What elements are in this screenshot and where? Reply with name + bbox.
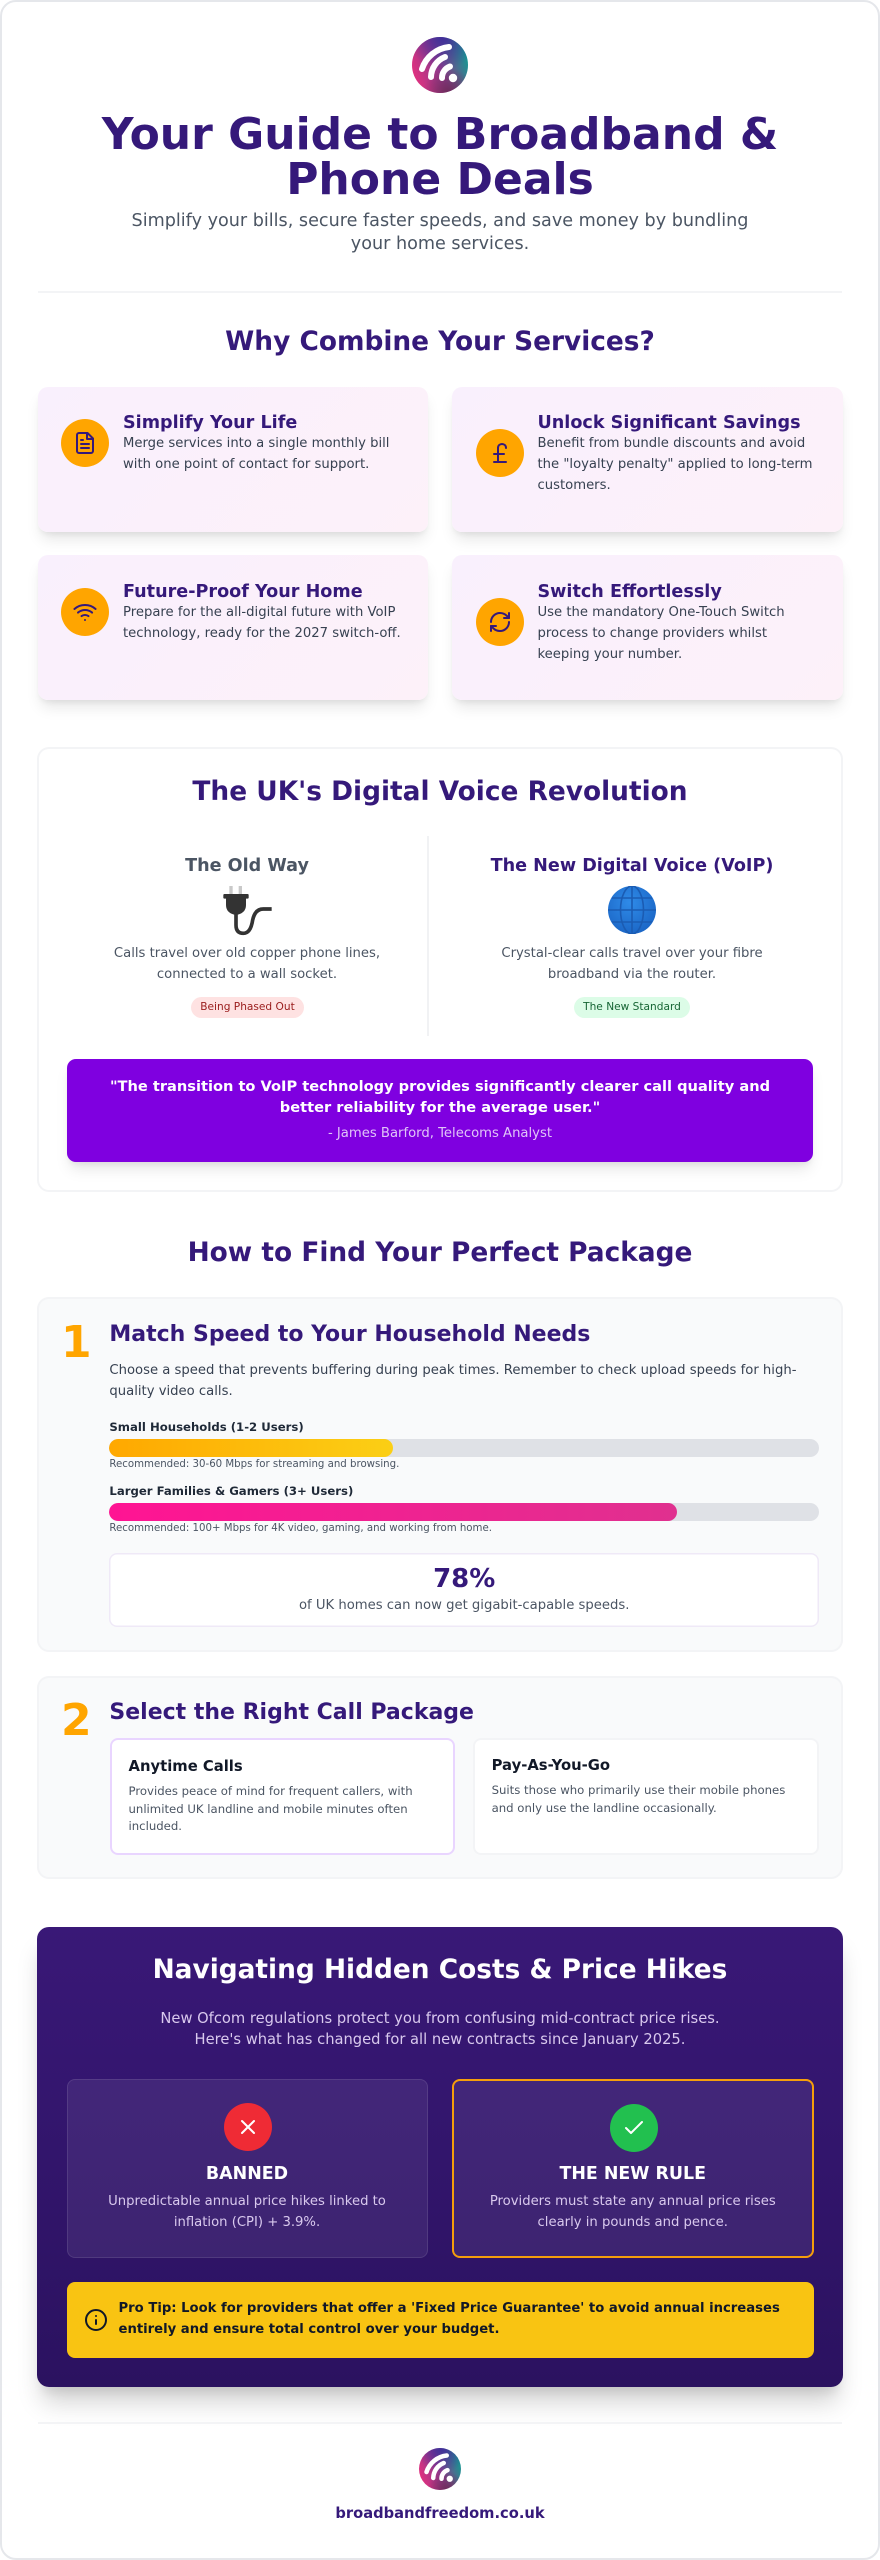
- benefit card: simplify: [38, 387, 428, 532]
- panel heading: Navigating Hidden Costs & Price Hikes: [153, 1954, 727, 1984]
- step heading: Match Speed to Your Household Needs: [109, 1322, 590, 1347]
- quote text: "The transition to VoIP technology provides significantly clearer call quality and: [110, 1078, 770, 1095]
- subtitle: your home services.: [351, 234, 529, 254]
- column text: connected to a wall socket.: [157, 967, 337, 982]
- bar: small households: [109, 1439, 819, 1457]
- card text: clearly in pounds and pence.: [538, 2215, 728, 2230]
- footer url: broadbandfreedom.co.uk: [335, 2504, 545, 2522]
- tip text: [118, 2301, 780, 2337]
- pill: being phased out: [191, 997, 304, 1018]
- column text: broadband via the router.: [548, 967, 716, 982]
- step text: [109, 1362, 796, 1398]
- package text: [492, 1783, 785, 1815]
- panel: step 2: [37, 1676, 843, 1879]
- card title: Future-Proof Your Home: [123, 582, 363, 602]
- icon: check: [610, 2104, 658, 2152]
- logo: [412, 37, 468, 93]
- package text: included.: [128, 1819, 182, 1833]
- package text: unlimited UK landline and mobile minutes often: [128, 1802, 408, 1816]
- package: pay as you go: [473, 1738, 819, 1855]
- card title: Switch Effortlessly: [538, 582, 722, 602]
- panel intro: [160, 2010, 720, 2048]
- package title: Anytime Calls: [128, 1758, 243, 1775]
- card text: Use the mandatory One-Touch Switch: [538, 605, 785, 620]
- column heading: The Old Way: [185, 856, 309, 876]
- card text: Benefit from bundle discounts and avoid: [538, 436, 805, 451]
- quote text: [110, 1078, 770, 1116]
- card text: Prepare for the all-digital future with VoIP: [123, 605, 395, 620]
- card: banned: [66, 2079, 428, 2258]
- column text: [501, 946, 763, 982]
- step number: 2: [61, 1695, 92, 1746]
- quote attribution: - James Barford, Telecoms Analyst: [328, 1126, 552, 1140]
- subtitle: Simplify your bills, secure faster speeds, and save money by bundling: [132, 210, 748, 230]
- column text: Calls travel over old copper phone lines,: [114, 946, 380, 961]
- pill: the new standard: [574, 997, 690, 1018]
- icon: cross: [224, 2103, 272, 2151]
- heading: how to find: How to Find Your Perfect Package: [188, 1237, 692, 1268]
- footer logo: [419, 2448, 461, 2490]
- column: new digital voice: [490, 856, 773, 1018]
- card text: Unpredictable annual price hikes linked to: [108, 2194, 386, 2208]
- tip text: entirely and ensure total control over your budget.: [118, 2322, 499, 2337]
- header: [101, 37, 778, 254]
- bar: larger families: [109, 1503, 819, 1521]
- benefit card: future-proof: [38, 555, 428, 700]
- column: old way: [114, 856, 380, 1018]
- package text: Provides peace of mind for frequent callers, with: [128, 1784, 413, 1798]
- label: small households: Small Households (1-2 Users): [109, 1420, 304, 1434]
- benefit card: switch: [452, 555, 843, 700]
- label: larger families: Larger Families & Gamers (3+ Users): [109, 1484, 353, 1498]
- tip text: Pro Tip: Look for providers that offer a 'Fixed Price Guarantee' to avoid annual increases: [118, 2301, 780, 2316]
- panel heading: The UK's Digital Voice Revolution: [192, 776, 688, 806]
- stat box: [109, 1553, 819, 1627]
- note: larger families: Recommended: 100+ Mbps for 4K video, gaming, and working from home.: [109, 1523, 492, 1534]
- card: new rule: [452, 2079, 814, 2258]
- icon: plug: [223, 886, 272, 936]
- pill: being phased out: Being Phased Out: [200, 1001, 295, 1013]
- column text: Crystal-clear calls travel over your fibre: [501, 946, 763, 961]
- card text: [123, 605, 401, 641]
- package text: and only use the landline occasionally.: [492, 1801, 717, 1815]
- card title: BANNED: [206, 2164, 288, 2184]
- icon: document: [61, 419, 109, 467]
- step text: Choose a speed that prevents buffering during peak times. Remember to check upload speeds for high-: [109, 1362, 796, 1378]
- card text: process to change providers whilst: [538, 626, 767, 641]
- icon: switch arrows: [476, 598, 524, 646]
- card text: keeping your number.: [538, 647, 682, 662]
- icon: wifi: [61, 588, 109, 636]
- column heading: The New Digital Voice (VoIP): [491, 856, 773, 876]
- panel intro: New Ofcom regulations protect you from confusing mid-contract price rises.: [160, 2010, 720, 2027]
- card text: technology, ready for the 2027 switch-off.: [123, 626, 401, 641]
- title: Phone Deals: [286, 154, 594, 204]
- icon: globe: [608, 886, 656, 934]
- pill: the new standard: The New Standard: [583, 1001, 681, 1013]
- card text: [538, 605, 785, 662]
- stat caption: of UK homes can now get gigabit-capable speeds.: [299, 1598, 629, 1612]
- title: Your Guide to Broadband &: [102, 108, 778, 160]
- step text: quality video calls.: [109, 1384, 233, 1398]
- card title: Simplify Your Life: [123, 413, 297, 433]
- note: small households: Recommended: 30-60 Mbps for streaming and browsing.: [109, 1459, 399, 1470]
- step heading: Select the Right Call Package: [109, 1700, 474, 1725]
- panel: digital voice revolution: [37, 747, 843, 1192]
- package title: Pay-As-You-Go: [492, 1757, 610, 1774]
- column text: [114, 946, 380, 982]
- package text: Suits those who primarily use their mobile phones: [492, 1783, 785, 1797]
- card text: Merge services into a single monthly bill: [123, 436, 389, 451]
- card text: customers.: [538, 478, 611, 493]
- card title: THE NEW RULE: [560, 2164, 706, 2184]
- title: [101, 108, 778, 204]
- benefit card: savings: [452, 387, 843, 532]
- quote callout: [67, 1059, 813, 1162]
- panel intro: Here's what has changed for all new contracts since January 2025.: [195, 2031, 685, 2048]
- icon: pound: [476, 429, 524, 477]
- package text: [128, 1784, 413, 1833]
- panel: step 1: [37, 1297, 843, 1652]
- pro tip: [66, 2282, 814, 2358]
- step number: 1: [61, 1317, 92, 1368]
- card text: inflation (CPI) + 3.9%.: [174, 2214, 320, 2230]
- stat value: 78%: [433, 1564, 495, 1594]
- card title: Unlock Significant Savings: [538, 413, 801, 433]
- heading: why combine: Why Combine Your Services?: [225, 326, 655, 357]
- card text: [490, 2194, 776, 2230]
- panel: hidden costs: [37, 1927, 843, 2387]
- card text: [108, 2194, 386, 2230]
- icon: info: [85, 2309, 107, 2331]
- card text: [123, 436, 389, 472]
- subtitle: [132, 210, 748, 254]
- quote text: better reliability for the average user.": [280, 1099, 600, 1116]
- card text: [538, 436, 812, 493]
- card text: the "loyalty penalty" applied to long-term: [538, 457, 812, 472]
- package: anytime calls: [110, 1738, 454, 1855]
- card text: Providers must state any annual price rises: [490, 2194, 776, 2209]
- card text: with one point of contact for support.: [123, 457, 369, 472]
- footer: [335, 2448, 545, 2522]
